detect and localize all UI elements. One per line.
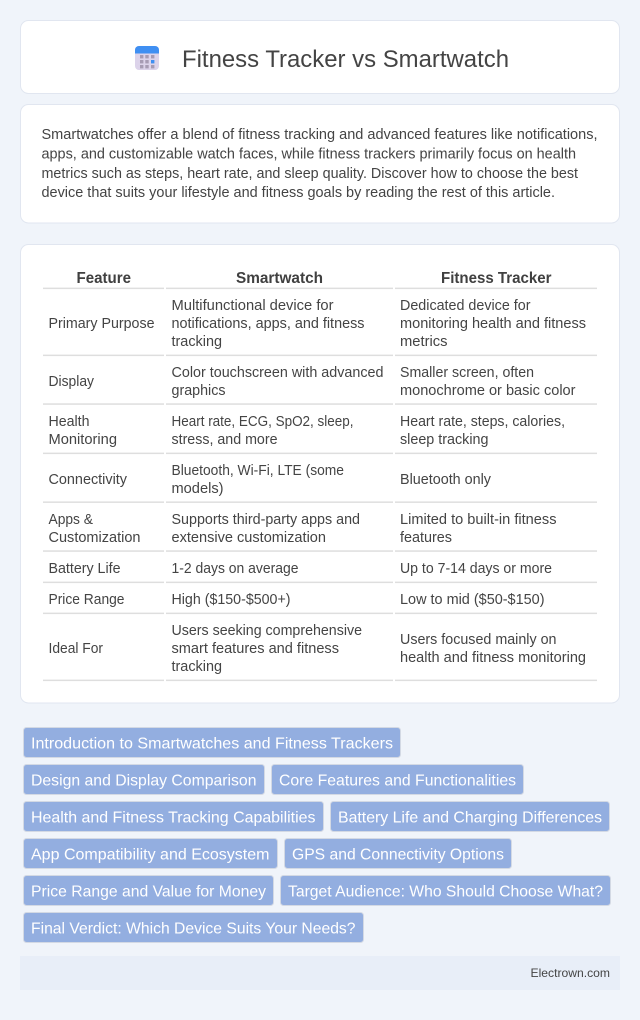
row: health monitoring: sleep tracking xyxy=(400,432,488,448)
row: apps and customization: features xyxy=(400,530,452,546)
row: price range: Price Range xyxy=(48,592,124,608)
row: connectivity: models) xyxy=(172,481,224,497)
row: apps and customization: extensive customization xyxy=(172,530,326,546)
tag: design and display xyxy=(24,764,264,794)
footer: Electrown.com xyxy=(530,966,610,980)
intro paragraph: device that suits your lifestyle and fitness goals by reading the rest of this article. xyxy=(42,185,555,201)
row: health monitoring: stress, and more xyxy=(172,432,278,448)
title: Fitness Tracker vs Smartwatch xyxy=(182,46,509,73)
row: apps and customization: Supports third-party apps and xyxy=(172,512,360,528)
row: display: graphics xyxy=(172,383,226,399)
tag: price range: Price Range and Value for Money xyxy=(31,884,266,900)
row: primary purpose: Multifunctional device for xyxy=(172,298,334,314)
table header row: Feature xyxy=(76,270,131,287)
row: apps and customization: Apps & xyxy=(48,512,93,528)
tag: core features xyxy=(272,764,524,794)
tag: health and fitness tracking xyxy=(24,802,324,832)
row: battery life: 1-2 days on average xyxy=(172,561,298,577)
row: display: Display xyxy=(48,374,95,390)
row: primary purpose: Primary Purpose xyxy=(48,316,154,332)
row: display xyxy=(48,365,576,399)
topic tag list xyxy=(24,728,610,942)
tag: core features: Core Features and Functionalities xyxy=(279,772,516,790)
row: health monitoring: Monitoring xyxy=(48,432,117,448)
icon: calendar xyxy=(135,46,159,70)
row: connectivity: Bluetooth only xyxy=(400,472,492,488)
row: apps and customization: Limited to built-in fitness xyxy=(400,512,556,528)
row: apps and customization: Customization xyxy=(48,530,140,546)
row: connectivity xyxy=(48,463,492,497)
intro paragraph xyxy=(42,127,598,201)
row: price range: Low to mid ($50-$150) xyxy=(400,592,544,608)
row: health monitoring xyxy=(48,414,565,448)
row: ideal for xyxy=(48,623,586,675)
row: battery life: Up to 7-14 days or more xyxy=(400,561,552,577)
intro paragraph: Smartwatches offer a blend of fitness tracking and advanced features like notifications, xyxy=(42,127,598,143)
row: primary purpose: Dedicated device for xyxy=(400,298,531,314)
row: display: Smaller screen, often xyxy=(400,365,534,381)
row: ideal for: Users focused mainly on xyxy=(400,632,556,648)
row: battery life: Battery Life xyxy=(48,561,120,577)
row: primary purpose: tracking xyxy=(172,334,222,350)
row: connectivity: Connectivity xyxy=(48,472,128,488)
row: display: monochrome or basic color xyxy=(400,383,576,399)
tag: final verdict: Final Verdict: Which Device Suits Your Needs? xyxy=(31,920,356,938)
row: battery life xyxy=(48,561,552,577)
footer xyxy=(20,956,620,990)
panel: intro text xyxy=(20,104,620,223)
tag: gps and connectivity: GPS and Connectivity Options xyxy=(292,846,504,864)
panel: title header xyxy=(20,20,620,94)
row: price range xyxy=(48,592,544,608)
row: ideal for: Ideal For xyxy=(48,641,103,657)
row: health monitoring: Health xyxy=(48,414,90,430)
tag: gps and connectivity xyxy=(284,838,512,868)
row: apps and customization xyxy=(48,512,556,546)
row: price range: High ($150-$500+) xyxy=(172,592,290,608)
table header row: Smartwatch xyxy=(236,270,323,287)
row: connectivity: Bluetooth, Wi-Fi, LTE (some xyxy=(172,463,344,479)
row: ideal for: Users seeking comprehensive xyxy=(172,623,362,639)
tag: introduction xyxy=(24,728,400,758)
tag: final verdict xyxy=(24,912,364,942)
tag: design and display: Design and Display Comparison xyxy=(31,772,256,790)
row: ideal for: health and fitness monitoring xyxy=(400,650,586,666)
tag: price range xyxy=(24,876,274,906)
row: primary purpose: notifications, apps, and fitness xyxy=(172,316,364,332)
tag: battery life xyxy=(330,802,610,832)
row: health monitoring: Heart rate, steps, calories, xyxy=(400,414,565,430)
table header row xyxy=(76,270,552,287)
row: primary purpose xyxy=(48,298,586,350)
row: primary purpose: metrics xyxy=(400,334,448,350)
panel: comparison table xyxy=(20,244,620,703)
tag: health and fitness tracking: Health and Fitness Tracking Capabilities xyxy=(31,810,316,826)
intro paragraph: metrics such as steps, heart rate, and sleep quality. Discover how to choose the best xyxy=(42,166,578,182)
row: ideal for: tracking xyxy=(172,659,222,675)
row: display: Color touchscreen with advanced xyxy=(172,365,384,381)
table header row: Fitness Tracker xyxy=(441,270,552,287)
tag: battery life: Battery Life and Charging Differences xyxy=(338,810,602,826)
tag: target audience xyxy=(280,876,610,906)
row: health monitoring: Heart rate, ECG, SpO2, sleep, xyxy=(172,414,354,430)
intro paragraph: apps, and customizable watch faces, while fitness trackers primarily focus on health xyxy=(42,146,576,162)
tag: introduction: Introduction to Smartwatches and Fitness Trackers xyxy=(31,736,393,752)
row: primary purpose: monitoring health and fitness xyxy=(400,316,586,332)
tag: app compatibility: App Compatibility and Ecosystem xyxy=(31,846,270,864)
tag: target audience: Target Audience: Who Should Choose What? xyxy=(288,884,603,900)
row: ideal for: smart features and fitness xyxy=(172,641,339,657)
tag: app compatibility xyxy=(24,838,278,868)
